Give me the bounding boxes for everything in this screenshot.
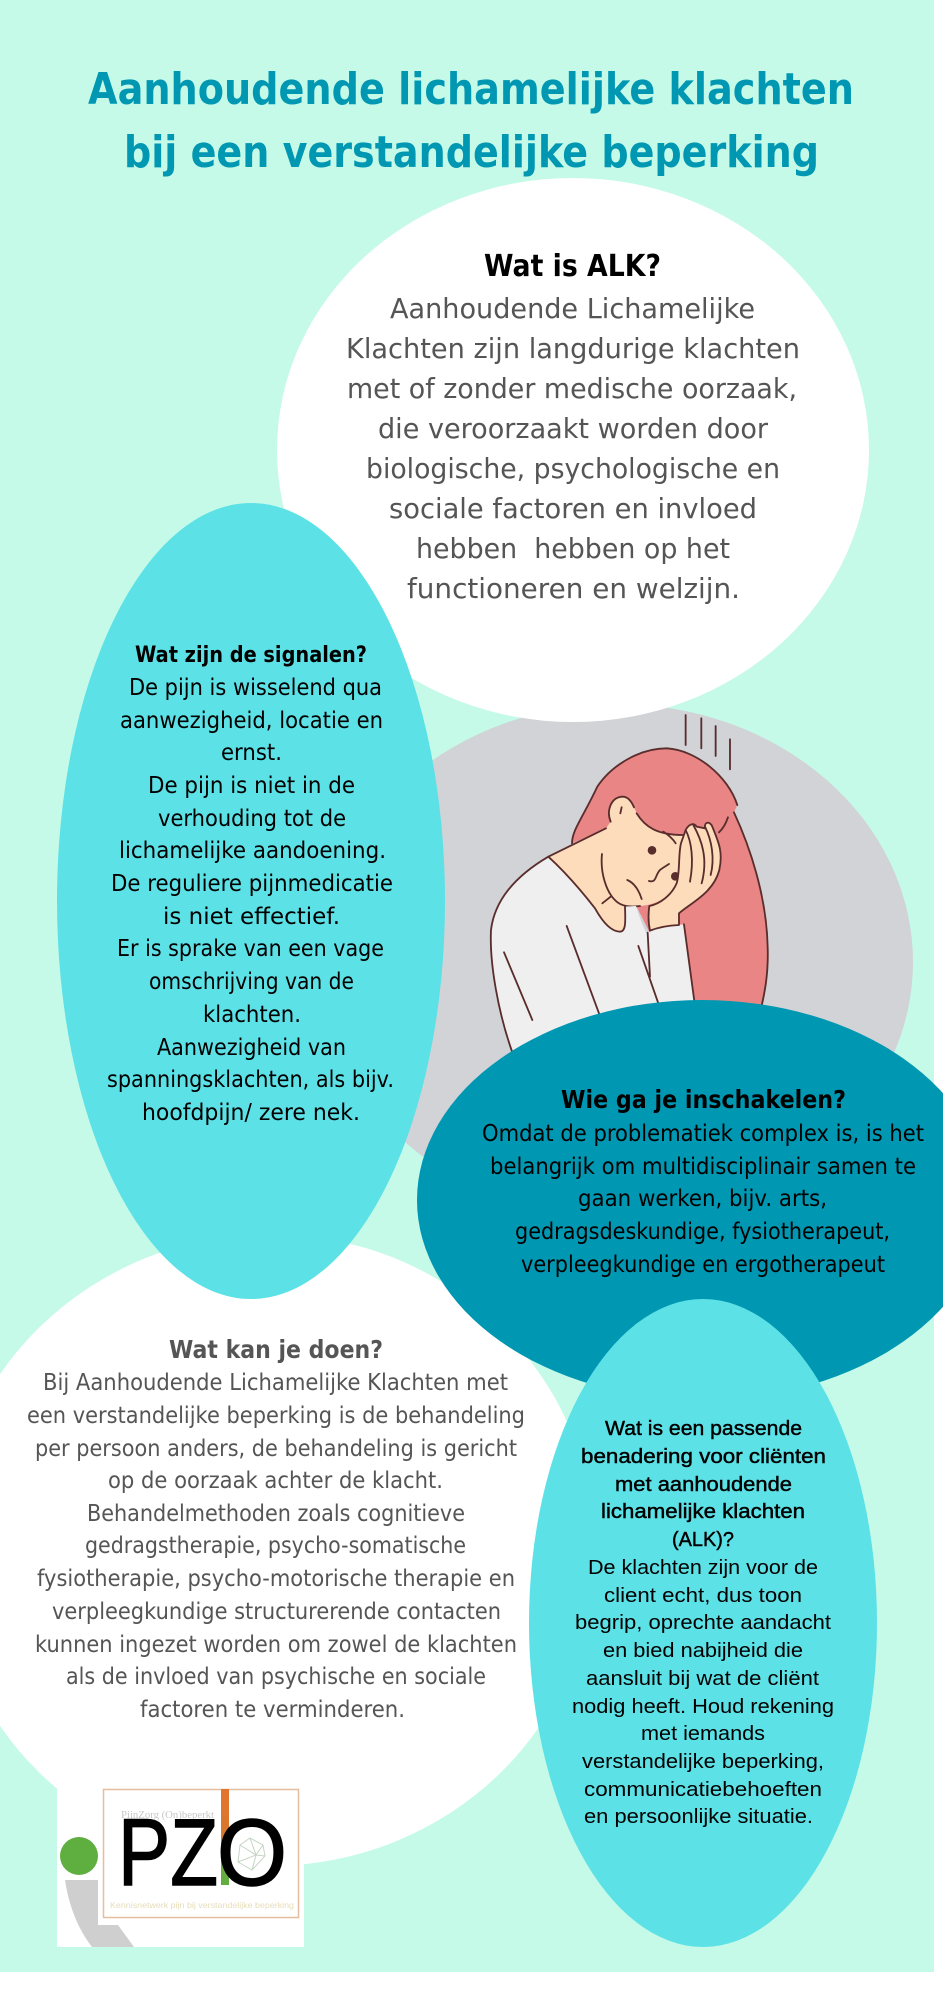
- heading: Wat is ALK?: Wat is ALK?: [484, 249, 661, 284]
- text: signals list: hoofdpijn/ zere nek.: [142, 1100, 360, 1126]
- title: bij een verstandelijke beperking: [124, 127, 819, 178]
- logo letters: PZ: [118, 1800, 218, 1906]
- text: signals list: spanningsklachten, als bijv.: [107, 1067, 394, 1093]
- logo network: [238, 1838, 265, 1870]
- text: approach: De klachten zijn voor de: [588, 1556, 818, 1579]
- text: approach: nodig heeft. Houd rekening: [572, 1695, 834, 1718]
- text: disciplines: gaan werken, bijv. arts,: [578, 1186, 827, 1212]
- text: approach: en persoonlijke situatie.: [584, 1805, 813, 1828]
- panel: Wat is ALK?: [277, 178, 869, 722]
- text: approach: aansluit bij wat de cliënt: [586, 1667, 819, 1690]
- text: definition: hebben hebben op het: [416, 532, 730, 565]
- grey circle behind figure: [321, 704, 913, 1220]
- text: signals list: ernst.: [221, 740, 282, 766]
- text: treatment: verpleegkundige structurerende contacten: [52, 1599, 501, 1625]
- logo green dot: [60, 1837, 98, 1875]
- text: disciplines: gedragsdeskundige, fysiotherapeut,: [515, 1219, 890, 1245]
- text: signals list: aanwezigheid, locatie en: [120, 708, 383, 734]
- eyes: [648, 846, 656, 855]
- text: approach: [572, 1556, 834, 1828]
- text: approach: begrip, oprechte aandacht: [575, 1611, 831, 1634]
- text: treatment: als de invloed van psychische en sociale: [66, 1664, 486, 1690]
- neck and face: [548, 797, 683, 932]
- text: treatment: [27, 1370, 525, 1723]
- panel: Wat zijn de signalen?: [57, 503, 445, 1299]
- title: [88, 64, 854, 178]
- text: signals list: verhouding tot de: [158, 806, 346, 832]
- logo tagline: Kennisnetwerk pijn bij verstandelijke beperking: [110, 1900, 294, 1910]
- text: approach: en bied nabijheid die: [603, 1639, 803, 1662]
- text: treatment: per persoon anders, de behandeling is gericht: [35, 1436, 517, 1462]
- text: signals list: Aanwezigheid van: [157, 1035, 346, 1061]
- logo: PZO: [57, 1783, 304, 1947]
- text: treatment: kunnen ingezet worden om zowel de klachten: [35, 1632, 517, 1658]
- finger lines: [686, 825, 713, 883]
- logo letter O: O: [217, 1800, 287, 1906]
- illustration: woman with headache: [491, 715, 768, 1053]
- heading: passende benadering: met aanhoudende: [615, 1473, 792, 1496]
- text: signals list: Er is sprake van een vage: [117, 936, 384, 962]
- hair: [572, 748, 768, 1020]
- logo bar: [221, 1789, 229, 1885]
- sweater: [491, 857, 696, 1053]
- heading: signalen: Wat zijn de signalen?: [135, 643, 367, 668]
- text: signals list: De reguliere pijnmedicatie: [111, 871, 393, 897]
- text: definition: Klachten zijn langdurige klachten: [346, 332, 800, 365]
- text: disciplines: [482, 1121, 924, 1278]
- text: treatment: factoren te verminderen.: [140, 1697, 405, 1723]
- text: definition: functioneren en welzijn.: [407, 572, 740, 605]
- text: treatment: een verstandelijke beperking is de behandeling: [27, 1403, 525, 1429]
- logo small title: PijnZorg (On)beperkt: [121, 1809, 214, 1821]
- text: signals list: lichamelijke aandoening.: [119, 838, 386, 864]
- text: definition: sociale factoren en invloed: [389, 492, 757, 525]
- face lines: [548, 797, 728, 906]
- heading: inschakelen: Wie ga je inschakelen?: [561, 1085, 846, 1114]
- text: treatment: Bij Aanhoudende Lichamelijke Klachten met: [43, 1370, 508, 1396]
- text: signals list: is niet effectief.: [163, 904, 340, 930]
- text: disciplines: verpleegkundige en ergotherapeut: [521, 1252, 885, 1278]
- text: treatment: gedragstherapie, psycho-somatische: [85, 1533, 466, 1559]
- sweater outline and creases: [491, 857, 696, 1053]
- text: approach: client echt, dus toon: [604, 1584, 802, 1607]
- panel: Wat kan je doen?: [0, 1234, 595, 1866]
- text: definition: Aanhoudende Lichamelijke: [390, 292, 755, 325]
- text: treatment: Behandelmethoden zoals cognitieve: [87, 1501, 465, 1527]
- text: treatment: op de oorzaak achter de klacht.: [108, 1468, 443, 1494]
- text: definition: [346, 292, 800, 605]
- heading: passende benadering: benadering voor cliënten: [581, 1445, 826, 1468]
- text: disciplines: belangrijk om multidisciplinair samen te: [490, 1154, 916, 1180]
- stress lines: [686, 715, 730, 769]
- text: signals list: [107, 675, 394, 1126]
- text: approach: communicatiebehoeften: [584, 1778, 822, 1801]
- logo frame: [104, 1790, 298, 1918]
- heading: passende benadering: (ALK)?: [672, 1528, 734, 1551]
- text: signals list: De pijn is wisselend qua: [129, 675, 382, 701]
- text: definition: die veroorzaakt worden door: [378, 412, 768, 445]
- text: definition: met of zonder medische oorzaak,: [347, 372, 797, 405]
- panel: passende benadering: [529, 1299, 877, 1947]
- heading: passende benadering: lichamelijke klachten: [601, 1500, 805, 1523]
- text: treatment: fysiotherapie, psycho-motorische therapie en: [37, 1566, 515, 1592]
- heading: passende benadering: Wat is een passende: [605, 1417, 802, 1440]
- text: signals list: De pijn is niet in de: [148, 773, 355, 799]
- text: signals list: klachten.: [203, 1002, 301, 1028]
- text: signals list: omschrijving van de: [149, 969, 354, 995]
- heading: Wat kan je doen?: Wat kan je doen?: [169, 1335, 383, 1364]
- text: approach: verstandelijke beperking,: [582, 1750, 824, 1773]
- logo grey shape: [65, 1880, 134, 1947]
- text: definition: biologische, psychologische en: [366, 452, 780, 485]
- heading: passende benadering: [581, 1417, 826, 1551]
- text: approach: met iemands: [641, 1722, 765, 1745]
- panel: Wie ga je inschakelen?: [417, 1000, 943, 1400]
- hand: [649, 823, 721, 931]
